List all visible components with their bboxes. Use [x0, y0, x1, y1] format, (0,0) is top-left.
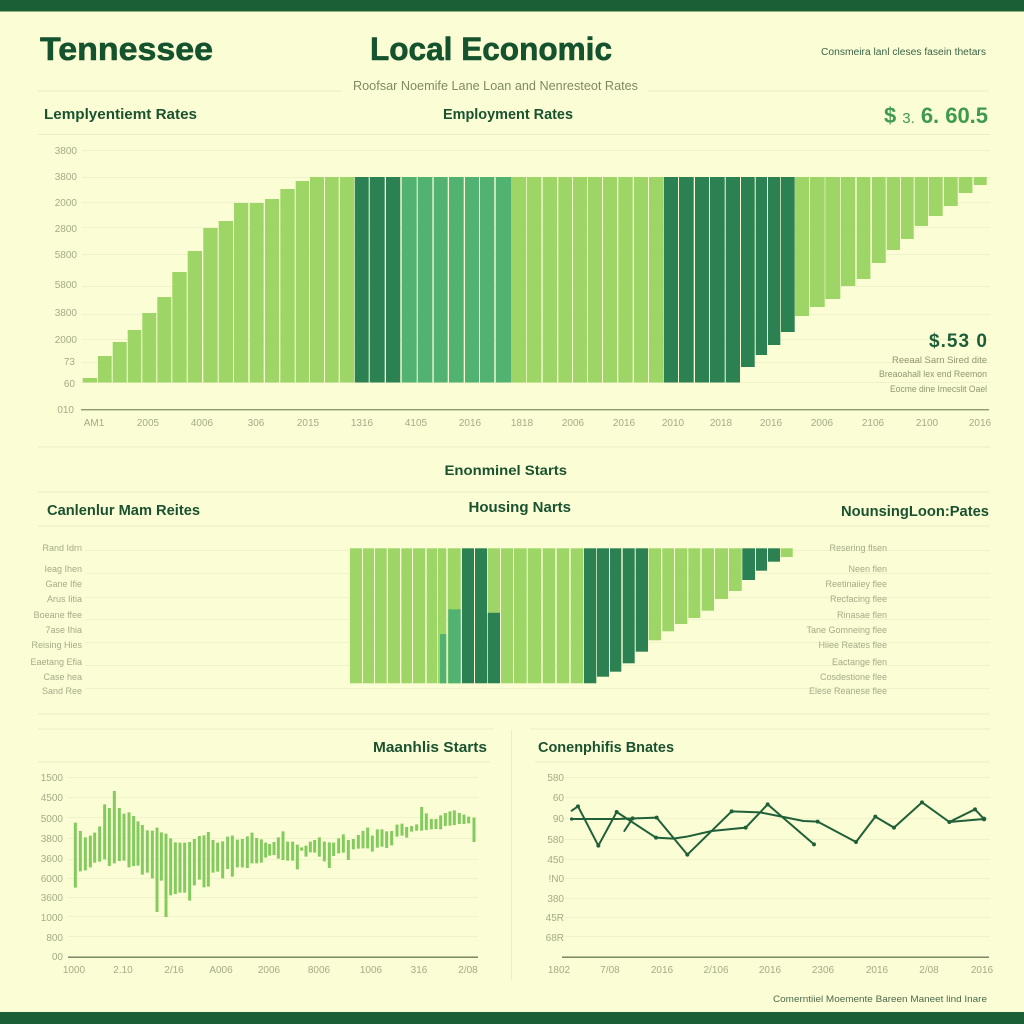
x axis labels: 2006	[562, 418, 585, 429]
subtitle: Roofsar Noemife Lane Loan and Nenresteot Rates	[353, 79, 638, 93]
y axis labels: 1500	[41, 773, 63, 784]
row labels left: Rand Idrn	[42, 543, 82, 553]
title: Tennessee: Tennessee	[40, 31, 213, 67]
row labels left: Ieag Ihen	[44, 564, 82, 574]
x axis labels: 2006	[258, 965, 281, 976]
light green bars	[350, 548, 793, 683]
row labels left: Reising Hies	[31, 640, 82, 650]
y axis labels: 1000	[41, 913, 63, 924]
x axis labels	[548, 965, 994, 976]
x axis labels: 2.10	[113, 965, 133, 976]
x axis labels: 2006	[811, 418, 834, 429]
top band	[0, 0, 1024, 12]
y axis labels: 2000	[55, 335, 77, 346]
callout: secondary value: $.53 0	[929, 331, 987, 352]
x axis labels: 2016	[459, 418, 482, 429]
row labels right: Cosdestione flee	[820, 672, 887, 682]
x axis labels: 2016	[760, 418, 783, 429]
x axis labels: 2018	[710, 418, 733, 429]
dark bars block one	[355, 177, 400, 382]
x axis labels: 2016	[613, 418, 636, 429]
row labels right	[806, 543, 887, 696]
headline value: $ 3. 6. 60.5	[884, 103, 988, 128]
x axis labels: 2/08	[919, 965, 939, 976]
row labels left: Arus Iitia	[47, 594, 82, 604]
x axis labels: 2/16	[164, 965, 184, 976]
y axis labels: 380	[547, 894, 564, 905]
heading: centre housing: Housing Narts	[468, 500, 571, 516]
heading: left employment: Lemplyentiemt Rates	[44, 107, 197, 123]
y axis labels: 580	[547, 773, 564, 784]
x axis labels	[63, 965, 478, 976]
mid green inset bars	[440, 609, 461, 683]
row labels right: Eactange flen	[832, 657, 887, 667]
x axis labels: 2005	[137, 418, 160, 429]
panel: employment rates chart	[44, 103, 992, 429]
y axis labels: 2000	[55, 198, 77, 209]
row labels right: Neen flen	[848, 564, 887, 574]
x axis labels: 2/08	[458, 965, 478, 976]
light green bars falling	[795, 177, 987, 316]
y axis labels: 3800	[55, 172, 77, 183]
y axis labels: 010	[57, 405, 74, 416]
row labels left: Case hea	[43, 672, 82, 682]
line series	[570, 800, 986, 857]
y axis labels: 73	[64, 357, 75, 368]
heading: left housing: Canlenlur Mam Reites	[47, 503, 200, 519]
y axis labels: 60	[64, 379, 75, 390]
header note: Consmeira lanl cleses fasein thetars	[821, 47, 986, 58]
x axis labels: 8006	[308, 965, 331, 976]
y axis labels: 3800	[41, 834, 63, 845]
row labels left	[30, 543, 82, 696]
x axis labels: 306	[248, 418, 265, 429]
row labels right: Elese Reanese flee	[809, 686, 887, 696]
footer note: Comerntiiel Moemente Bareen Maneet lind Inare	[773, 994, 987, 1005]
dark bars block two	[664, 177, 795, 382]
callout: secondary value: Breaoahall lex end Reemon	[879, 369, 987, 380]
y axis labels: 450	[547, 855, 564, 866]
y axis labels: 800	[46, 933, 63, 944]
y axis labels: 60	[553, 793, 564, 804]
x axis labels: 1802	[548, 965, 571, 976]
x axis labels: 2016	[759, 965, 782, 976]
light green bars rising	[83, 177, 354, 382]
row labels left: Gane Ifie	[45, 579, 82, 589]
y axis labels	[41, 773, 63, 963]
row labels right: Hiiee Reates flee	[818, 640, 887, 650]
floating bars	[75, 791, 474, 917]
y axis labels: 3600	[41, 893, 63, 904]
row labels left: Sand Ree	[42, 686, 82, 696]
bottom band	[0, 1012, 1024, 1024]
x axis labels: 1316	[351, 418, 374, 429]
callout: secondary value: Eocme dine Imecslit Oael	[890, 384, 987, 395]
x axis labels	[84, 418, 992, 429]
y axis labels: 4500	[41, 793, 63, 804]
x axis line	[81, 409, 989, 410]
row labels right: Tane Gomneing flee	[806, 625, 887, 635]
x axis labels: 2/106	[703, 965, 729, 976]
row labels left: Boeane ffee	[34, 610, 82, 620]
callout: secondary value	[879, 331, 987, 395]
x axis labels: 2100	[916, 418, 939, 429]
x axis line	[68, 956, 478, 958]
panel: housing chart	[30, 462, 990, 696]
row labels right: Rinasae flen	[837, 610, 887, 620]
y axis labels: 2800	[55, 224, 77, 235]
heading: economic starts: Enonminel Starts	[444, 462, 567, 478]
y axis labels: 3800	[55, 146, 77, 157]
x axis labels: 2010	[662, 418, 685, 429]
x axis labels: 316	[411, 965, 428, 976]
x axis labels: 1000	[63, 965, 86, 976]
y axis labels: 5800	[55, 250, 77, 261]
heading: monthly starts: Maanhlis Starts	[373, 740, 487, 756]
heading: right housing: NounsingLoon:Pates	[841, 504, 989, 520]
x axis labels: 1818	[511, 418, 534, 429]
x axis labels: 2016	[969, 418, 992, 429]
x axis labels: 4006	[191, 418, 214, 429]
panel: consumption rates line chart	[538, 740, 994, 976]
y axis labels: 90	[553, 814, 564, 825]
row labels left: 7ase Ihia	[45, 625, 82, 635]
row labels right: Recfacing flee	[830, 594, 887, 604]
y axis labels: 3600	[41, 854, 63, 865]
heading: consumption rates: Conenphifis Bnates	[538, 740, 674, 756]
x axis labels: 7/08	[600, 965, 620, 976]
x axis labels: 2106	[862, 418, 885, 429]
y axis labels: 6000	[41, 874, 63, 885]
light green bars plateau	[511, 177, 664, 382]
row labels left: Eaetang Efia	[30, 657, 82, 667]
y axis labels: 580	[547, 835, 564, 846]
y axis labels: 3800	[55, 308, 77, 319]
callout: secondary value: Reeaal Sarn Sired dite	[892, 355, 987, 366]
dark green bars	[462, 548, 780, 683]
x axis line	[562, 956, 989, 958]
title: Local Economic: Local Economic	[370, 31, 612, 67]
x axis labels: A006	[209, 965, 233, 976]
y axis labels: !N0	[548, 874, 564, 885]
y axis labels: 45R	[546, 913, 564, 924]
row labels right: Resering flsen	[829, 543, 887, 553]
mid green bars	[402, 177, 511, 382]
heading: centre employment: Employment Rates	[443, 107, 573, 123]
panel: monthly starts chart	[41, 740, 487, 976]
y axis labels	[55, 146, 77, 416]
x axis labels: 1006	[360, 965, 383, 976]
x axis labels: 2015	[297, 418, 320, 429]
x axis labels: 2016	[971, 965, 994, 976]
x axis labels: 2306	[812, 965, 835, 976]
y axis labels: 5000	[41, 814, 63, 825]
x axis labels: 2016	[651, 965, 674, 976]
x axis labels: AM1	[84, 418, 105, 429]
y axis labels	[546, 773, 564, 944]
y axis labels: 68R	[546, 933, 564, 944]
x axis labels: 2016	[866, 965, 889, 976]
row labels right: Reetinaiiey flee	[825, 579, 887, 589]
y axis labels: 5800	[55, 280, 77, 291]
x axis labels: 4105	[405, 418, 428, 429]
y axis labels: 00	[52, 952, 63, 963]
